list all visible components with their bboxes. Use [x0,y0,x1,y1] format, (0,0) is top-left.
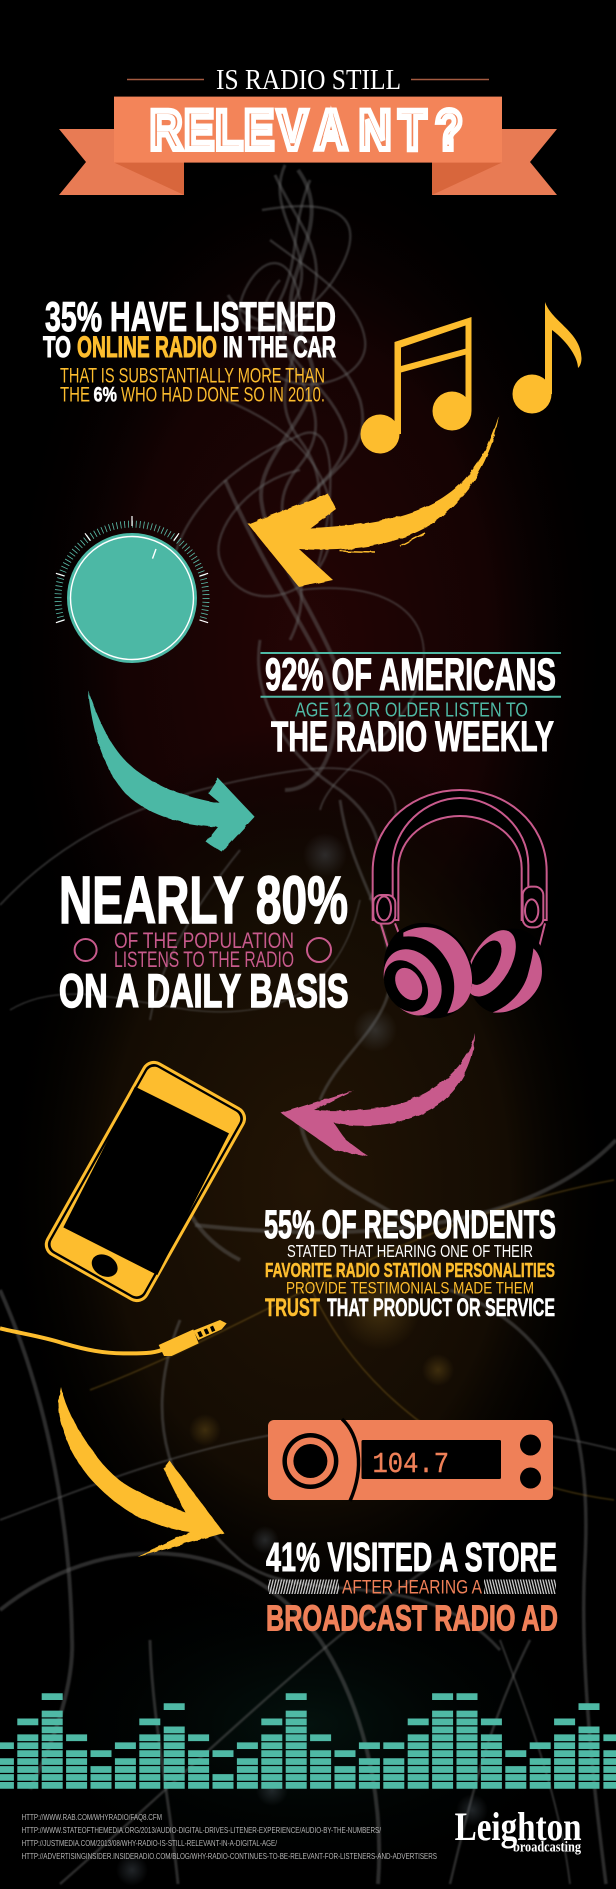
text block: 35% online radio: TO [43,331,71,364]
text block: 41% visited a store: AFTER HEARING A [342,1578,482,1598]
inner band line [393,798,528,897]
text block: 35% online radio: THE [60,384,90,407]
right ear cup [454,915,559,1027]
text block: 55% of respondents [264,1203,556,1322]
icon: car radio: 104.7 [372,1448,449,1481]
text block: 55% of respondents: PROVIDE TESTIMONIALS MADE THEM [286,1278,534,1298]
source references: HTTP://ADVERTISINGINSIDER.INSIDERADIO.COM/BLOG/WHY-RADIO-CONTINUES-TO-BE-RELEVANT-FOR-LISTENERS-AND-ADVERTISERS [22,1851,437,1861]
arrow: yellow to knob [248,415,499,587]
left slider [373,895,395,924]
headband [373,790,547,920]
source references: HTTP://WWW.RAB.COM/WHYRADIO/FAQ8.CFM [22,1812,162,1822]
text block: 41% visited a store [266,1534,558,1639]
text block: 35% online radio: 6% [94,384,117,407]
text block: nearly 80%: ON A DAILY BASIS [59,964,348,1017]
arrow: yellow to radio [59,1387,224,1557]
icon: audio cable [0,1320,227,1356]
arrow: pink to phone [281,1033,475,1157]
text block: 92% of americans: AGE 12 OR OLDER LISTEN TO [295,699,528,722]
text block: 55% of respondents: STATED THAT HEARING ONE OF THEIR [287,1241,533,1261]
text block: nearly 80%: LISTENS TO THE RADIO [114,947,294,972]
text block: 55% of respondents: TRUST [265,1294,320,1322]
banner: relevant [59,97,557,195]
text block: 35% online radio: ONLINE RADIO [77,331,217,364]
icon: car radio [268,1419,553,1501]
source references: HTTP://JUSTMEDIA.COM/2013/08/WHY-RADIO-IS-STILL-RELEVANT-IN-A-DIGITAL-AGE/ [22,1838,277,1848]
equalizer [3,1693,610,1789]
text block: 35% online radio: THAT IS SUBSTANTIALLY MORE THAN [60,364,325,388]
banner: relevant: RELEVANT? [150,98,463,161]
text block: 35% online radio [43,293,336,407]
logo: leighton broadcasting: Leighton [455,1804,582,1849]
left ear cup [367,907,490,1035]
arrow: teal to headphones [88,690,255,852]
text block: nearly 80% [59,863,348,1017]
title: IS RADIO STILL [216,65,401,96]
icon: smartphone [40,1056,251,1307]
source references: HTTP://WWW.STATEOFTHEMEDIA.ORG/2013/AUDIO-DIGITAL-DRIVES-LITENER-EXPERIENCE/AUDIO-BY-THE-NUMBERS/ [22,1825,381,1835]
icon: headphones [367,790,559,1035]
logo: leighton broadcasting: broadcasting [513,1840,581,1856]
icon: volume knob [56,516,208,663]
icon: music notes [360,302,582,454]
text block: nearly 80%: OF THE POPULATION [114,928,294,953]
text block: 92% of americans [260,649,561,761]
text block: 35% online radio: WHO HAD DONE SO IN 2010. [121,384,325,407]
text block: nearly 80%: NEARLY 80% [59,863,348,938]
right slider [523,887,543,927]
text block: 35% online radio: IN THE CAR [223,331,336,364]
yokes [381,923,545,952]
source references [22,1812,437,1861]
background glows [116,833,488,1886]
text block: 35% online radio: 35% HAVE LISTENED [45,293,336,340]
